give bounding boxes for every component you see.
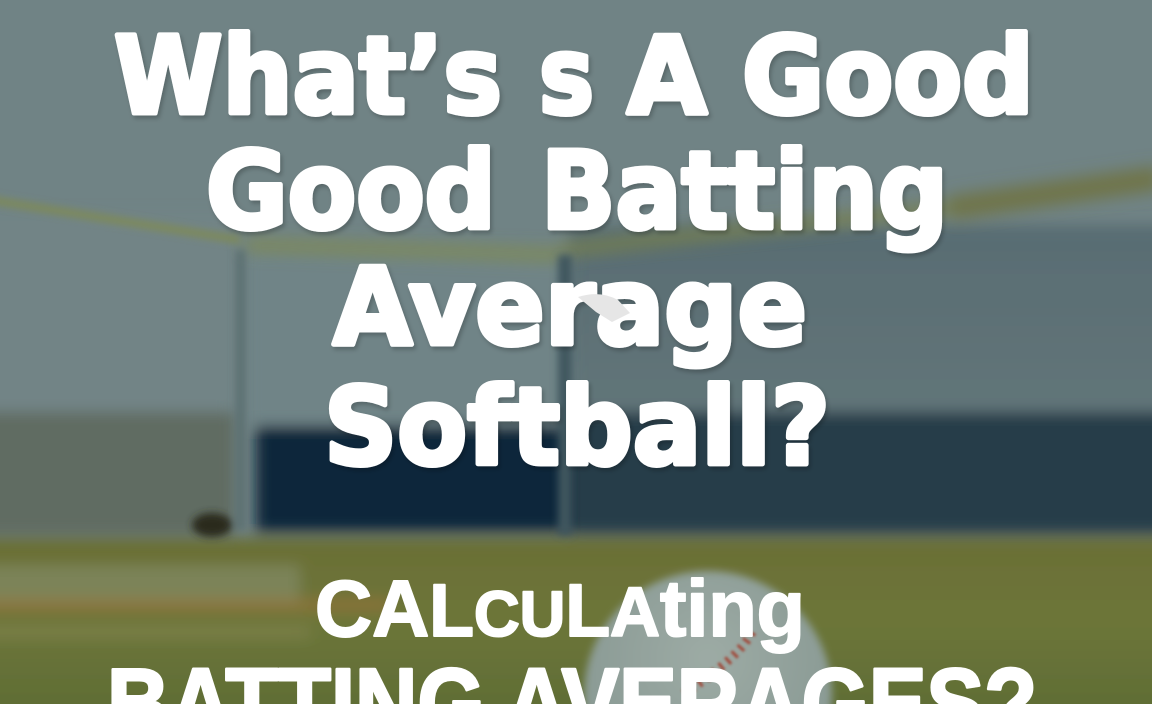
- title line 4: Softball?: [324, 366, 830, 490]
- title line 1: s: [539, 15, 594, 139]
- title line 2: Good: [206, 130, 496, 254]
- title line 1: What’s: [114, 15, 502, 139]
- title line 1: [114, 15, 1034, 139]
- subtitle line 1: CALCULAting: [315, 564, 805, 653]
- title line 2: [206, 130, 948, 254]
- subtitle: Calculating Batting Averages?: [107, 564, 1037, 704]
- title line 1: A: [627, 15, 707, 139]
- title: What's A Good Batting Average Softball?: [114, 15, 1034, 490]
- title line 3: Average: [333, 246, 807, 370]
- icon: softball with red stitches: [584, 571, 832, 704]
- title line 2: Batting: [541, 130, 948, 254]
- title line 1: Good: [742, 15, 1034, 139]
- artifact: small grey smudge over title letter: [578, 294, 630, 322]
